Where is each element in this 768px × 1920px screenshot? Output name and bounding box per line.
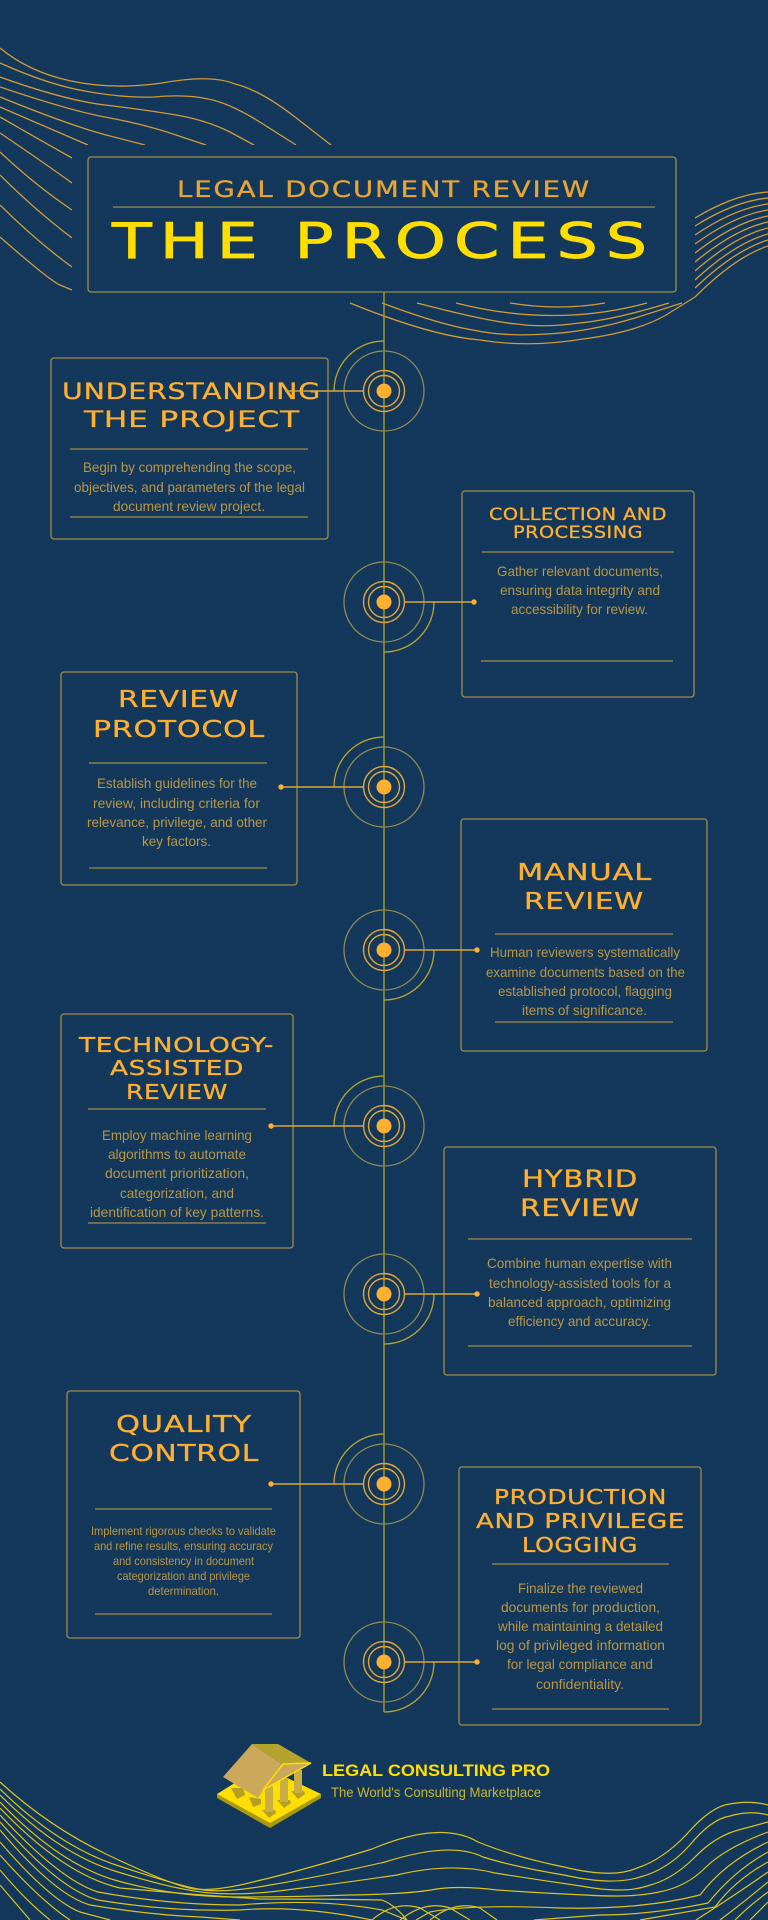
body text: determination.	[148, 1584, 219, 1598]
body text: categorization and privilege	[117, 1569, 250, 1583]
heading	[93, 687, 265, 743]
panel: production and privilege logging	[459, 1467, 701, 1725]
decorative waves: bottom	[0, 1782, 768, 1920]
panel: hybrid review	[444, 1147, 716, 1375]
body text: Finalize the reviewed	[518, 1580, 643, 1596]
heading: PRODUCTION	[494, 1485, 667, 1509]
body text	[87, 775, 267, 849]
heading: AND PRIVILEGE	[476, 1509, 685, 1533]
heading: ASSISTED	[110, 1056, 244, 1080]
heading: REVIEW	[520, 1194, 640, 1222]
heading: MANUAL	[517, 860, 652, 886]
body text	[497, 563, 663, 617]
logo	[217, 1744, 550, 1828]
timeline node 3	[278, 737, 424, 827]
body text: relevance, privilege, and other	[87, 814, 267, 830]
body text: ensuring data integrity and	[500, 582, 660, 598]
body text: items of significance.	[522, 1002, 647, 1018]
body text: balanced approach, optimizing	[488, 1294, 671, 1310]
body text: identification of key patterns.	[90, 1204, 264, 1220]
body text: log of privileged information	[496, 1637, 665, 1653]
body text: while maintaining a detailed	[497, 1618, 663, 1634]
body text: Human reviewers systematically	[490, 944, 680, 960]
body text: categorization, and	[120, 1185, 234, 1201]
heading: REVIEW	[126, 1080, 228, 1104]
brand name: LEGAL CONSULTING PRO	[322, 1762, 550, 1780]
heading	[476, 1485, 685, 1557]
timeline node 8	[344, 1622, 480, 1712]
body text: Combine human expertise with	[487, 1255, 672, 1271]
timeline node 1	[285, 341, 424, 431]
heading: THE PROJECT	[83, 407, 300, 433]
body text: objectives, and parameters of the legal	[74, 479, 305, 495]
panel: manual review	[461, 819, 707, 1051]
title: THE PROCESS	[111, 213, 655, 270]
body text: key factors.	[142, 833, 211, 849]
tagline: The World's Consulting Marketplace	[331, 1784, 541, 1800]
heading: UNDERSTANDING	[62, 379, 321, 405]
body text: document review project.	[113, 498, 265, 514]
heading	[109, 1410, 259, 1467]
body text: accessibility for review.	[511, 601, 648, 617]
body text: algorithms to automate	[108, 1146, 246, 1162]
body text: Gather relevant documents,	[497, 563, 663, 579]
body text: established protocol, flagging	[498, 983, 672, 999]
heading	[489, 505, 667, 542]
body text: for legal compliance and	[507, 1656, 653, 1672]
heading: QUALITY	[116, 1410, 252, 1438]
decorative waves: top left	[0, 48, 331, 290]
panel: header	[88, 157, 676, 292]
body text: Implement rigorous checks to validate	[91, 1524, 276, 1538]
timeline node 5	[268, 1076, 424, 1166]
panel: review protocol	[61, 672, 297, 885]
heading: REVIEW	[118, 687, 239, 713]
heading: PROTOCOL	[93, 717, 265, 743]
body text	[74, 459, 305, 514]
heading: CONTROL	[109, 1439, 259, 1467]
body text: examine documents based on the	[486, 964, 685, 980]
icon: courthouse	[217, 1744, 321, 1828]
body text: document prioritization,	[105, 1165, 249, 1181]
body text: and refine results, ensuring accuracy	[94, 1539, 273, 1553]
timeline spine	[383, 292, 385, 1712]
header backdrop	[72, 145, 695, 303]
heading: HYBRID	[522, 1165, 638, 1193]
panel: quality control	[67, 1391, 300, 1638]
heading	[520, 1165, 640, 1222]
body text: efficiency and accuracy.	[508, 1313, 651, 1329]
body text: documents for production,	[501, 1599, 660, 1615]
body text: Establish guidelines for the	[97, 775, 257, 791]
body text: and consistency in document	[113, 1554, 255, 1568]
timeline node 6	[344, 1254, 480, 1344]
subtitle: LEGAL DOCUMENT REVIEW	[177, 178, 591, 203]
timeline node 7	[268, 1434, 424, 1524]
body text	[90, 1127, 264, 1220]
heading: LOGGING	[522, 1533, 638, 1557]
panel: collection and processing	[462, 491, 694, 697]
decorative waves: under header	[350, 297, 695, 344]
timeline node 2	[344, 562, 477, 652]
body text: Employ machine learning	[102, 1127, 252, 1143]
body text	[486, 944, 685, 1018]
panel: understanding the project	[51, 358, 328, 539]
timeline node 4	[344, 910, 480, 1000]
body text: confidentiality.	[536, 1676, 624, 1692]
heading	[62, 379, 321, 433]
body text	[91, 1524, 276, 1598]
body text: technology-assisted tools for a	[489, 1275, 671, 1291]
heading	[517, 860, 652, 915]
body text: review, including criteria for	[93, 795, 260, 811]
body text: Begin by comprehending the scope,	[83, 459, 296, 475]
heading: COLLECTION AND	[489, 505, 667, 524]
heading	[78, 1033, 274, 1104]
body text	[496, 1580, 665, 1692]
body text	[487, 1255, 672, 1329]
decorative waves: top right	[695, 192, 768, 297]
heading: TECHNOLOGY-	[78, 1033, 274, 1057]
panel: technology-assisted review	[61, 1014, 293, 1248]
heading: REVIEW	[524, 889, 644, 915]
heading: PROCESSING	[513, 523, 643, 542]
